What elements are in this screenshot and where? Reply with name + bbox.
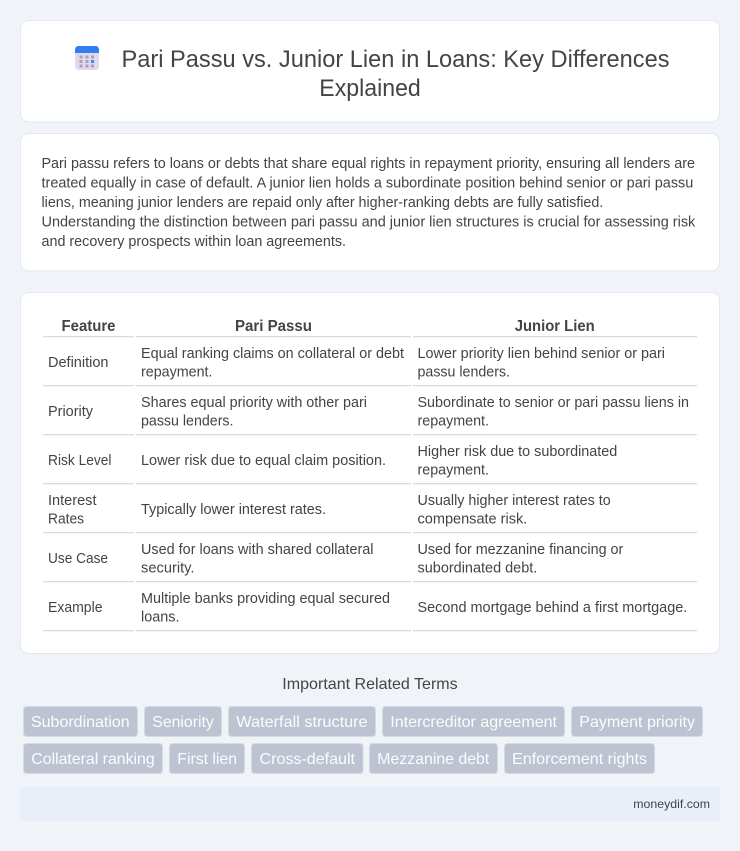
row: interest rates <box>43 493 697 533</box>
footer <box>20 787 720 821</box>
row: risk level <box>43 444 697 484</box>
row: definition <box>43 346 697 386</box>
text block: summary: and recovery prospects within loan agreements. <box>42 234 346 250</box>
row: use case <box>43 542 697 582</box>
tag: enforcement rights: Enforcement rights <box>512 751 647 768</box>
row: risk level: Lower risk due to equal claim position. <box>141 453 386 469</box>
row: example: Example <box>48 600 102 616</box>
text block: summary: Pari passu refers to loans or debts that share equal rights in repayment priority, ensuring all lenders are <box>42 156 695 172</box>
table header: Feature <box>62 318 116 335</box>
tag: mezzanine debt <box>370 744 498 774</box>
tag: subordination: Subordination <box>31 714 130 731</box>
tag: payment priority: Payment priority <box>579 714 695 731</box>
tag: first lien <box>170 744 244 774</box>
related term tags <box>24 706 702 774</box>
footer: moneydif.com <box>633 797 710 811</box>
panel: title card <box>20 20 720 122</box>
row: use case: security. <box>141 560 194 576</box>
text block: summary: treated equally in case of default. A junior lien holds a subordinate position behind senior or pari passu <box>42 175 693 191</box>
table header <box>43 318 697 337</box>
tag: seniority <box>144 706 222 736</box>
panel: summary paragraph <box>20 134 720 271</box>
row: risk level: repayment. <box>418 462 489 478</box>
row: example: loans. <box>141 610 180 626</box>
row: risk level: Risk Level <box>48 453 112 469</box>
row: use case: Used for mezzanine financing or <box>418 542 624 558</box>
tag: waterfall structure <box>228 706 376 736</box>
tag: intercreditor agreement: Intercreditor agreement <box>390 714 558 731</box>
tag: subordination <box>24 706 138 736</box>
row: risk level: Higher risk due to subordinated <box>418 444 617 460</box>
tag: waterfall structure: Waterfall structure <box>236 714 368 731</box>
row: definition: Definition <box>48 355 108 371</box>
row: interest rates: compensate risk. <box>418 512 527 528</box>
panel: comparison table <box>20 292 720 654</box>
icon: calendar <box>75 46 99 70</box>
row: definition: Lower priority lien behind senior or pari <box>418 346 665 362</box>
tag: payment priority <box>572 706 702 736</box>
text block: summary: liens, meaning junior lenders are repaid only after higher-ranking debts are fully satisfied. <box>42 195 603 211</box>
row: priority: Shares equal priority with other pari <box>141 395 367 411</box>
tag: first lien: First lien <box>177 751 237 768</box>
title: Pari Passu vs. Junior Lien in Loans: Key Differences <box>122 46 670 73</box>
tag: cross-default <box>252 744 363 774</box>
row: example <box>43 591 697 631</box>
tag: collateral ranking <box>24 744 162 774</box>
text block: summary <box>42 156 696 250</box>
row: definition: passu lenders. <box>418 364 510 380</box>
title <box>122 46 670 102</box>
title: Explained <box>319 75 421 102</box>
row: interest rates: Interest <box>48 493 96 509</box>
tag: enforcement rights <box>504 744 654 774</box>
row: interest rates: Rates <box>48 512 84 528</box>
row: use case: subordinated debt. <box>418 560 537 576</box>
table header: Junior Lien <box>515 318 595 335</box>
row: use case: Use Case <box>48 551 108 567</box>
row: example: Multiple banks providing equal secured <box>141 591 390 607</box>
row: definition: repayment. <box>141 364 212 380</box>
tag: seniority: Seniority <box>152 714 214 731</box>
row: priority: Subordinate to senior or pari passu liens in <box>418 395 689 411</box>
tag: intercreditor agreement <box>382 706 564 736</box>
row: interest rates: Usually higher interest rates to <box>418 493 611 509</box>
text block: summary: Understanding the distinction between pari passu and junior lien structures is crucial for assessing risk <box>42 214 696 230</box>
tag: mezzanine debt: Mezzanine debt <box>377 751 490 768</box>
row: priority <box>43 395 697 435</box>
row: definition: Equal ranking claims on collateral or debt <box>141 346 404 362</box>
row: priority: Priority <box>48 404 94 420</box>
heading: important related terms: Important Related Terms <box>282 676 458 693</box>
row: priority: passu lenders. <box>141 414 234 430</box>
row: example: Second mortgage behind a first mortgage. <box>418 600 687 616</box>
row: priority: repayment. <box>418 414 489 430</box>
row: use case: Used for loans with shared collateral <box>141 542 374 558</box>
tag: collateral ranking: Collateral ranking <box>31 751 155 768</box>
table header: Pari Passu <box>235 318 312 335</box>
tag: cross-default: Cross-default <box>260 751 356 768</box>
row: interest rates: Typically lower interest rates. <box>141 502 326 518</box>
